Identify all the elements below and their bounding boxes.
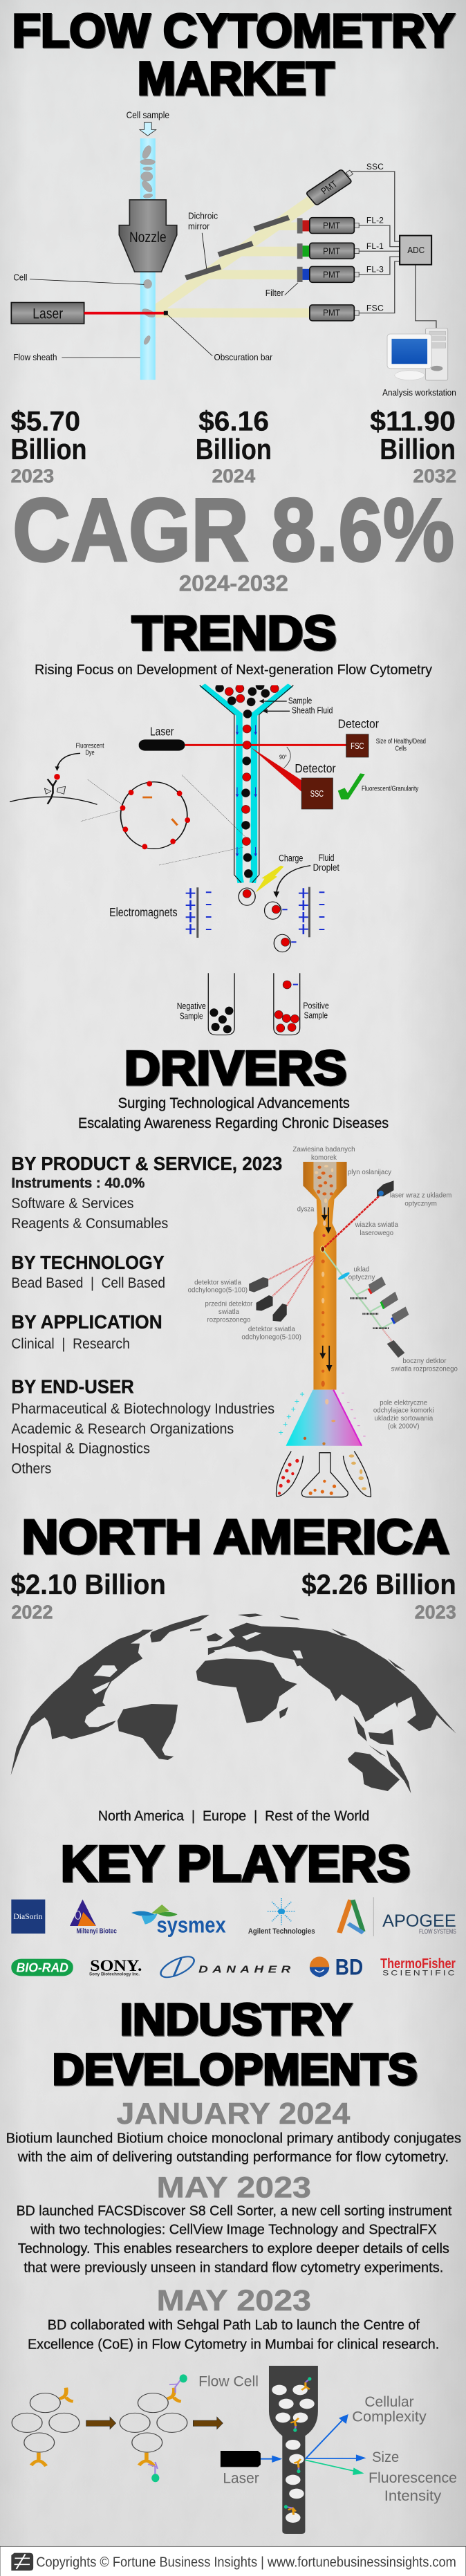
charge lightning [256,866,283,893]
segment: product and service: Instruments : 40.0% [11,1174,145,1192]
logo: Bio-Rad: BIO-RAD [17,1961,68,1975]
laser: Laser [223,2470,259,2487]
fluorescent dye antibody: Dye [85,750,95,757]
segment: end-user: BY END-USER [11,1375,134,1397]
logo: Miltenyi Biotec [70,1900,117,1935]
deflection field [279,1390,366,1446]
diagram labels: uklad [353,1266,369,1273]
segment: product and service: Reagents & Consumables [11,1216,168,1232]
segment: technology: Bead Based | Cell Based [11,1275,165,1291]
PMT detectors [297,169,359,321]
sample labels with arrows: Sheath Fluid [292,705,333,716]
diagram labels: wiazka swiatla [355,1221,398,1229]
cell cluster stained [120,2374,187,2482]
negative sample tube: Negative [177,1001,206,1011]
sample cells [216,682,279,718]
measurement labels: Cellular [364,2394,414,2410]
logo: Sysmex: sysmex [157,1913,226,1937]
flow arrows [236,725,257,855]
map: inland seas [92,1632,400,1724]
segment: product and service: Software & Services [11,1196,133,1212]
logo mark [11,2553,33,2570]
arrow [86,2417,116,2429]
measurement labels: Size [372,2449,399,2465]
date: May 2023 second: MAY 2023 [157,2284,311,2317]
channel labels: SSC [366,162,384,172]
detector labels: Size of Healthy/Dead [376,738,426,745]
trends subtitle: Rising Focus on Development of Next-generation Flow Cytometry [35,662,432,678]
cell sorter diagram [10,682,426,1035]
logo: Danaher [156,1953,291,1981]
laser beam [185,742,346,748]
fluorescent dye antibody [10,743,104,804]
driver lines: Surging Technological Advancements [118,1094,350,1111]
diagram labels: detektor swiatla [248,1326,295,1333]
sample cells [140,145,156,345]
north america section [10,1569,456,1824]
heading: drivers: DRIVERS [124,1041,347,1095]
sample core [313,1162,337,1214]
diagram labels: swiatla [218,1308,239,1316]
driver lines: Escalating Awareness Regarding Chronic Diseases [78,1114,389,1131]
charge and droplet labels: Fluid [319,853,335,863]
lens [337,1271,351,1281]
measurement labels [352,2394,457,2504]
heading: industry developments: DEVELOPMENTS [53,2046,418,2094]
detector labels: 90° [279,754,287,761]
drivers and segmentation [11,1094,458,1497]
flow direction arrows [321,1207,331,1370]
callout labels [13,210,456,398]
forward scatter rays [268,1256,398,1349]
logo: Apogee Flow Systems [339,1897,456,1936]
logo: Sony: SONY. [90,1956,142,1974]
development text 2 [17,2203,452,2275]
antibody staining and flow cell diagram [12,2366,457,2534]
PMT detectors: PMT [319,178,339,196]
droplets [239,888,297,952]
title: FLOW CYTOMETRY [12,4,455,57]
logo: Agilent Technologies [248,1898,315,1936]
charge and droplet labels: Charge [279,853,303,864]
callout labels: mirror [188,221,209,231]
channel labels: FL-3 [366,264,384,274]
diagram labels: laserowego [360,1230,394,1237]
SSC detector: Detector [295,762,336,775]
development text 1 [6,2130,461,2165]
PMT detectors: PMT [323,220,341,230]
diagram labels: plyn oslanijacy [348,1169,391,1176]
logo: BD [310,1955,363,1980]
logo: BD: BD [335,1955,363,1980]
icon: computer workstation [387,328,448,380]
fluorescent dye antibody: Fluorescent [76,743,104,750]
diagram labels: Zawiesina badanych [292,1146,355,1153]
laser [11,302,84,324]
channel labels [366,162,384,313]
heading: industry developments: INDUSTRY [120,1994,351,2044]
logo: Agilent Technologies: Agilent Technologies [248,1927,315,1936]
detector labels [279,738,426,793]
date: May 2023: MAY 2023 [157,2171,311,2204]
heading: industry developments [53,1994,418,2094]
FSC detector [338,718,379,757]
ADC: ADC [407,245,425,255]
logo: Bio-Rad [11,1959,73,1976]
suspended cells [315,1165,333,1387]
sorting chamber diagram [188,1146,458,1497]
diagram labels: detektor swiatla [194,1279,241,1286]
diagram labels: optycznym [404,1200,437,1207]
dichroic mirrors [186,218,289,278]
FSC detector: FSC [351,741,364,751]
detector labels: Fluorescent/Granularity [362,786,418,793]
laser: Laser [32,305,63,322]
map: australia [348,1752,400,1791]
positive sample tube [274,973,329,1035]
logo: Thermo Fisher Scientific: SCIENTIFIC [382,1969,455,1977]
driver lines [78,1094,389,1131]
detectors [249,1277,409,1358]
segment: end-user: Others [11,1461,51,1477]
segment: technology [11,1252,165,1291]
segment: end-user: Pharmaceutical & Biotechnology Industries [11,1401,274,1417]
sample labels with arrows: Sample [288,696,312,706]
callout labels: Dichroic [188,210,218,221]
obscuration bar [164,311,168,315]
logo: Thermo Fisher Scientific [380,1956,456,1977]
stat 2024: 2024 [212,465,256,486]
world map [10,1613,456,1793]
segment: technology: BY TECHNOLOGY [11,1252,165,1273]
detection arrows [261,2414,366,2475]
stat 2032: 2032 [413,465,456,486]
heading: trends: TRENDS [131,606,336,660]
laser beam [324,1196,379,1248]
collection vessels [277,1452,371,1497]
title [12,4,455,105]
diagram labels: odchylonego(5-100) [241,1333,301,1341]
map: scandinavia arctic [238,1613,263,1617]
development text 3 [28,2317,439,2352]
PMT detectors: PMT [323,269,341,279]
PMT detectors: PMT [323,307,341,317]
map: greenland [150,1615,209,1642]
icon: laser head [377,1180,393,1196]
SSC detector [295,762,336,809]
nozzle: Nozzle [129,228,167,245]
orange flow chamber [303,1162,347,1390]
footer band [0,2546,466,2576]
stat 2023 [301,1569,456,1623]
funnel channel [200,685,293,883]
sample labels with arrows [259,696,333,716]
FSC detector: Detector [338,718,379,731]
map: southeast asia islands [353,1716,367,1741]
callout labels: Filter [265,288,284,298]
map: africa [196,1658,297,1723]
ADC [400,236,431,265]
diagram labels: rozproszonego [207,1317,251,1324]
positive sample tube: Sample [304,1010,328,1021]
channel cells [241,725,252,878]
stat 2024 [196,405,272,486]
diagram labels: pole elektryczne [380,1399,428,1407]
diagram labels [188,1146,458,1431]
stat 2023: 2023 [10,465,54,486]
detector labels: Cells [395,745,407,752]
laser [221,2451,261,2487]
diagram labels: (ok 2000V) [388,1423,419,1431]
sample label: Cell sample [127,111,169,121]
diagram labels: laser wraz z ukladem [390,1192,451,1200]
logo: DiaSorin: DiaSorin [13,1912,43,1921]
flow cell label: Flow Cell [198,2373,259,2390]
callout labels: Obscuration bar [214,352,272,362]
heading: north america: NORTH AMERICA [22,1510,449,1564]
CAGR period: 2024-2032 [179,571,288,595]
negative sample tube [177,973,234,1035]
stat 2023 [10,405,87,486]
segment: application [11,1311,162,1352]
stat 2022: 2022 [11,1602,53,1623]
company logos [11,1897,456,1981]
logo: Danaher: DANAHER [198,1963,291,1975]
angle arc [283,747,290,768]
channel labels: FSC [366,303,384,313]
map: eurasia [208,1623,456,1734]
electromagnets: Electromagnets [109,905,178,919]
date: January 2024: JANUARY 2024 [116,2096,350,2131]
icon: green check [338,773,365,799]
stat 2023: $5.70 [10,405,80,436]
nozzle [119,200,177,272]
negative sample tube: Sample [180,1011,203,1021]
map: north america [10,1630,153,1775]
flow cell [269,2366,318,2534]
diagram labels: odchylonego(5-100) [188,1287,248,1295]
beams [147,196,315,317]
mirrors [350,1298,389,1328]
cell cluster unstained [12,2388,80,2466]
SSC detector: SSC [310,789,324,799]
wires [351,172,436,328]
logo: DiaSorin [11,1900,45,1934]
diagram labels: boczny detktor [402,1358,447,1365]
map: madagascar [279,1707,288,1718]
market size stats [10,405,456,595]
stat 2022: $2.10 Billion [10,1569,166,1600]
positive sample tube: Positive [303,1001,329,1011]
segment: product and service: BY PRODUCT & SERVICE, 2023 [11,1153,282,1174]
charge and droplet labels: Droplet [313,862,339,873]
optical path [324,1251,393,1328]
callout labels: Flow sheath [13,352,57,362]
stat 2022 [10,1569,166,1623]
arrow [193,2417,223,2429]
development timeline [6,2096,461,2352]
measurement labels: Complexity [352,2409,427,2425]
laser: Laser [150,725,174,739]
stat 2024: Billion [196,434,272,466]
diagram labels: komorek [311,1154,337,1162]
stat 2023: Billion [10,434,87,466]
segment: application: Clinical | Research [11,1336,130,1352]
callout labels: Cell [13,272,28,282]
magnified cell [120,781,190,849]
map: south america [118,1704,178,1760]
measurement labels: Intensity [384,2488,442,2504]
diagram labels: dysza [297,1206,315,1214]
diagram labels: optyczny [348,1274,375,1281]
segment: end-user [11,1375,274,1477]
logo: Miltenyi Biotec: Miltenyi Biotec [76,1928,117,1935]
region list: North America | Europe | Rest of the World [98,1808,369,1824]
PMT detectors: PMT [323,245,341,256]
map: iceland [190,1628,202,1631]
flow sheath [140,138,156,380]
segment: end-user: Hospital & Diagnostics [11,1440,150,1457]
stat 2024: $6.16 [198,405,269,436]
segment: application: BY APPLICATION [11,1311,162,1333]
diagram labels: odchylajace komorki [373,1407,434,1415]
diagram labels: swiatla rozproszonego [391,1365,458,1373]
charge and droplet labels [273,853,339,898]
electromagnets [109,887,324,938]
laser [139,725,185,751]
scatter cone [251,748,301,792]
diagram labels: ukladzie sortowania [375,1415,434,1423]
map: british isles [207,1633,223,1641]
interrogation point [321,1246,325,1252]
segment: product and service [11,1153,282,1232]
logo: Sysmex [131,1905,226,1937]
arrow: sample input [140,122,156,136]
channel labels: FL-1 [366,241,384,251]
channel labels: FL-2 [366,215,384,225]
title: MARKET [137,53,335,105]
laser beam [84,312,165,315]
footer [0,2546,466,2576]
heading: key players: KEY PLAYERS [61,1836,411,1892]
stat 2032 [370,405,456,486]
segment: end-user: Academic & Research Organizations [11,1421,234,1437]
flow cytometer schematic [11,111,456,398]
diagram labels: przedni detektor [205,1301,253,1308]
logo: Sony: Sony Biotechnology Inc. [89,1972,140,1976]
